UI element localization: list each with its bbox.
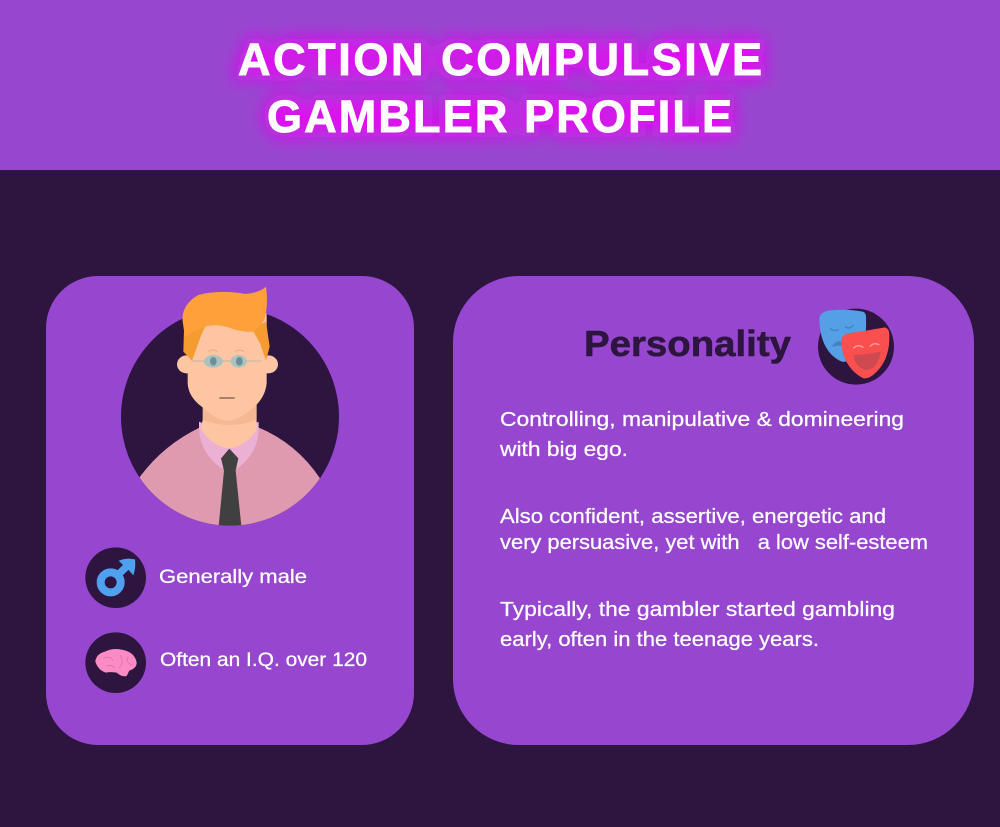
title: GAMBLER PROFILE [267,91,732,142]
icon: brain [85,632,146,693]
panel: personality [453,276,974,745]
text: paragraph 2: very persuasive, yet with a low self-esteem [500,531,928,554]
text: paragraph 2 [500,505,928,554]
icon: male symbol [85,547,146,608]
label: IQ: Often an I.Q. over 120 [160,649,367,671]
text: paragraph 1 [499,408,904,461]
text: paragraph 1: Controlling, manipulative & domineering [500,408,904,431]
label: generally male: Generally male [159,566,307,588]
icon: theatre masks [818,309,894,385]
title [238,34,762,142]
text: paragraph 3: Typically, the gambler started gambling [500,598,895,621]
text: paragraph 1: with big ego. [499,438,628,461]
avatar illustration [120,287,340,533]
text: paragraph 3: early, often in the teenage years. [500,628,819,651]
header banner [0,0,1000,170]
text: paragraph 3 [500,598,895,651]
heading: personality: Personality [584,323,791,364]
panel: profile [46,276,414,745]
title: ACTION COMPULSIVE [238,34,762,85]
text: paragraph 2: Also confident, assertive, energetic and [500,505,886,528]
header banner: ACTION COMPULSIVE [238,33,762,85]
header banner: GAMBLER PROFILE [267,90,732,142]
